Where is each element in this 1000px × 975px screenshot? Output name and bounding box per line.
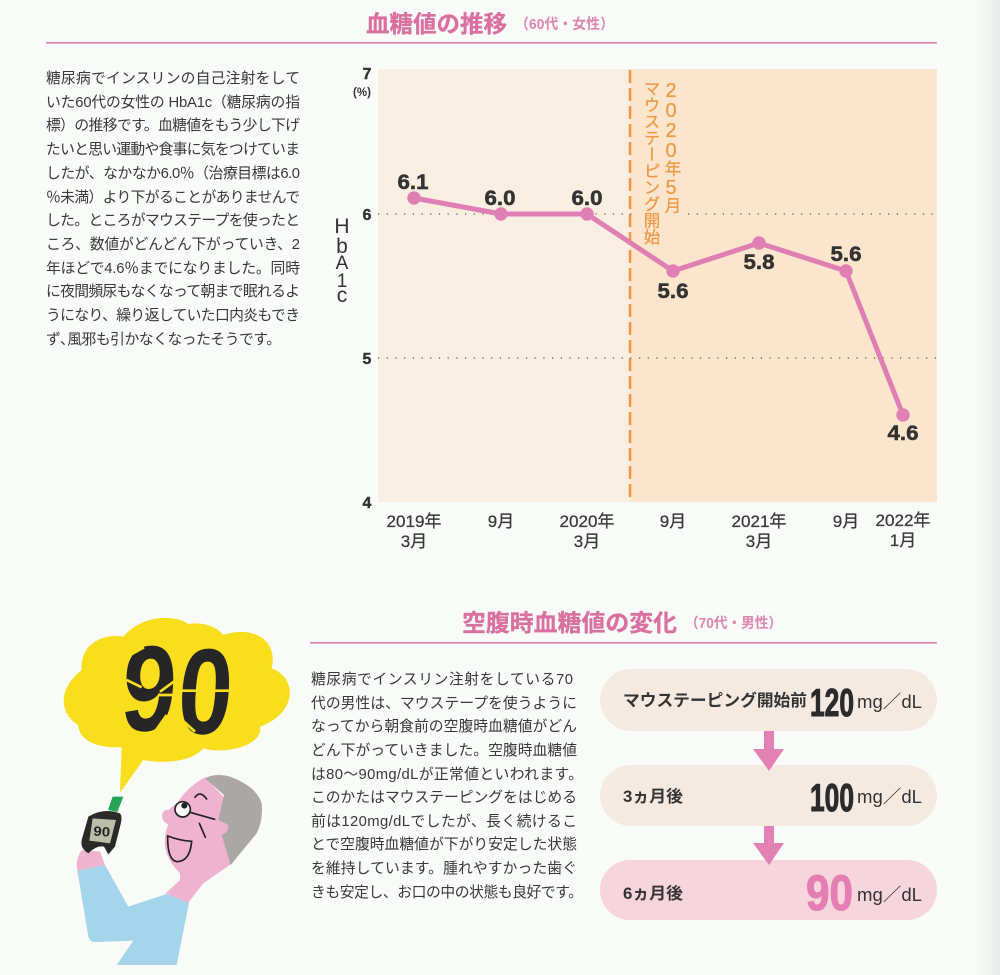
text block: fasting glucose case description: を維持しています。腫れやすかった歯ぐ	[311, 860, 577, 877]
data values: 6.0	[572, 187, 602, 210]
text block: fasting glucose case description: 代の男性は、マウステープを使うように	[311, 695, 577, 712]
x axis labels: 9月	[660, 512, 686, 531]
y axis labels: 6	[363, 207, 372, 224]
x axis labels: 2021年	[732, 512, 786, 531]
marker label: マウステーピング開始	[641, 80, 660, 245]
hair	[205, 775, 262, 865]
glucose meter	[81, 797, 123, 854]
glucose meter: 90	[93, 824, 111, 840]
data values: 4.6	[888, 422, 918, 445]
y axis labels: (%)	[353, 87, 371, 99]
x axis labels: 2020年	[560, 512, 614, 531]
panel: before taping 120: 120	[810, 682, 854, 725]
panel: before taping 120	[600, 669, 937, 731]
text block: fasting glucose case description: とで空腹時血糖値が下がり安定した状態	[311, 836, 577, 853]
speech cloud	[64, 618, 290, 793]
y axis title: H	[334, 215, 350, 238]
panel: after 3 months 100	[600, 765, 937, 826]
data values: 6.1	[398, 171, 429, 194]
text block: fasting glucose case description: このかたはマウステーピングをはじめる	[311, 789, 577, 806]
panel: after 3 months 100: 3ヵ月後	[623, 786, 683, 806]
neck and face	[162, 777, 231, 903]
data values	[398, 171, 918, 445]
x axis labels: 1月	[890, 531, 916, 550]
y axis labels: 5	[363, 351, 372, 368]
text block: HbA1c case description: ％未満）より下がることがありませんで	[46, 189, 300, 206]
x axis labels	[386, 511, 930, 551]
arrow: 3 months to 6 months	[753, 826, 784, 865]
text block: HbA1c case description: 標）の推移です。血糖値をもう少し下げ	[46, 117, 300, 134]
text block: HbA1c case description: ころ、数値がどんどん下がっていき、2	[46, 236, 300, 253]
text block: HbA1c case description: 糖尿病でインスリンの自己注射をして	[46, 70, 300, 87]
x axis labels: 3月	[574, 532, 600, 551]
text block: fasting glucose case description: なってから朝食前の空腹時血糖値がどん	[311, 718, 577, 735]
x axis labels: 9月	[488, 512, 514, 531]
y axis labels: 7	[363, 66, 372, 83]
text block: fasting glucose case description: どん下がっていきました。空腹時血糖値	[311, 742, 577, 759]
text block: fasting glucose case description: きも安定し、お口の中の状態も良好です。	[311, 884, 583, 901]
heading: blood sugar trend: （60代・女性）	[515, 16, 614, 33]
text block: HbA1c case description: ず､風邪も引かなくなったそうです。	[46, 331, 281, 348]
y axis title: b	[336, 235, 348, 258]
panel: after 3 months 100: 100	[810, 777, 854, 820]
data line	[407, 191, 910, 422]
panel: after 6 months 90: 6ヵ月後	[623, 883, 683, 903]
x axis labels: 3月	[401, 532, 427, 551]
y axis title: A	[336, 253, 349, 274]
y axis title: c	[337, 284, 347, 307]
shirt	[77, 865, 189, 965]
text block: HbA1c case description	[46, 70, 300, 348]
panel: after 3 months 100: mg／dL	[857, 787, 922, 807]
text block: HbA1c case description: した。ところがマウステープを使ったと	[46, 212, 300, 229]
text block: fasting glucose case description: は80〜90mg/dLが正常値といわれます。	[311, 766, 583, 783]
text block: fasting glucose case description	[311, 671, 583, 901]
data values: 5.8	[744, 251, 775, 274]
heading: blood sugar trend: 血糖値の推移	[366, 11, 507, 37]
marker label	[641, 80, 682, 245]
panel: after 6 months 90	[600, 860, 937, 921]
illustration: man with glucose meter	[64, 618, 290, 965]
panel: before taping 120: mg／dL	[857, 692, 922, 712]
y axis title: 1	[337, 271, 347, 292]
text block: HbA1c case description: 年ほどで4.6％までになりました。同時	[46, 260, 300, 277]
text block: fasting glucose case description: 糖尿病でインスリン注射をしている70	[311, 671, 573, 688]
text block: HbA1c case description: に夜間頻尿もなくなって朝まで眠れるよ	[46, 283, 300, 300]
heading: blood sugar trend	[366, 11, 614, 37]
text block: HbA1c case description: いた60代の女性の HbA1c（糖尿病の指	[46, 94, 300, 111]
line chart: HbA1c trend	[334, 66, 937, 551]
display reading 90: 90	[117, 622, 238, 760]
text block: fasting glucose case description: 前は120mg/dLでしたが、長く続けるこ	[311, 813, 577, 830]
data values: 5.6	[658, 280, 688, 303]
heading: fasting blood sugar change: （70代・男性）	[685, 615, 782, 632]
dashed marker: taping start	[629, 70, 631, 502]
y axis title	[334, 215, 350, 307]
text block: HbA1c case description: したが、なかなか6.0％（治療目標は6.0	[46, 165, 300, 182]
panel: after 6 months 90: mg／dL	[857, 885, 922, 905]
arrow: before to 3 months	[753, 731, 784, 771]
face details	[168, 794, 215, 862]
x axis labels: 9月	[833, 512, 859, 531]
data values: 6.0	[484, 187, 516, 210]
panel: after 6 months 90: 90	[806, 865, 853, 921]
text block: HbA1c case description: たいと思い運動や食事に気をつけていま	[46, 141, 300, 158]
data values: 5.6	[830, 243, 862, 266]
marker label: 2020 年 5 月	[660, 80, 682, 214]
x axis labels: 2019年	[386, 512, 442, 531]
y axis labels	[353, 66, 372, 512]
x axis labels: 2022年	[876, 511, 930, 530]
hand	[77, 850, 105, 871]
y axis labels: 4	[363, 495, 372, 512]
panel: before taping 120: マウステーピング開始前	[623, 690, 807, 710]
heading: fasting blood sugar change: 空腹時血糖値の変化	[462, 610, 677, 636]
text block: HbA1c case description: うになり、繰り返していた口内炎もでき	[46, 307, 300, 324]
heading: fasting blood sugar change	[462, 610, 782, 636]
x axis labels: 3月	[746, 532, 772, 551]
